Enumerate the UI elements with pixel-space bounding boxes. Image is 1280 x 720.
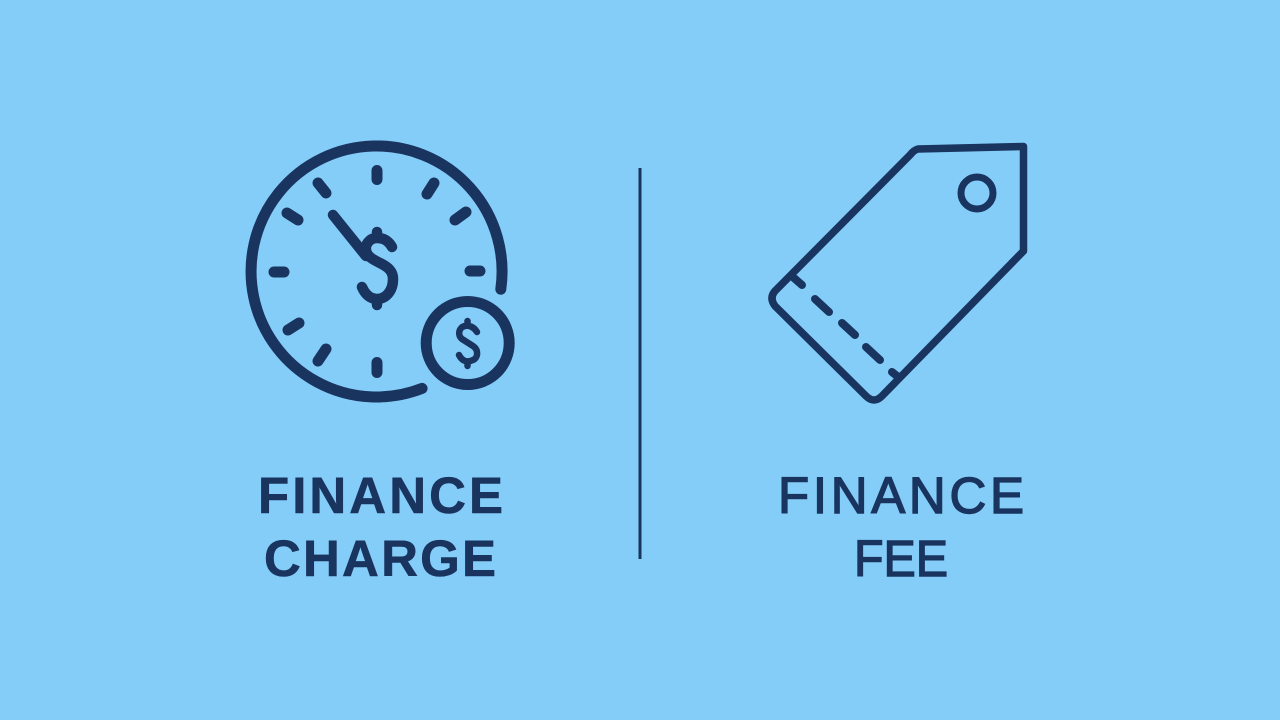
icon: price tag bbox=[772, 146, 1024, 400]
clock rim bbox=[251, 146, 502, 397]
tag dashed line bbox=[794, 278, 897, 376]
panel: finance charge bbox=[251, 146, 509, 587]
heading: finance fee: FINANCE bbox=[778, 467, 1024, 524]
panel: finance fee bbox=[772, 146, 1024, 587]
heading: finance charge bbox=[258, 467, 503, 587]
clock hand bbox=[333, 215, 366, 256]
heading: finance charge: FINANCE bbox=[258, 467, 503, 524]
clock ticks bbox=[274, 170, 480, 372]
tag outline bbox=[772, 146, 1024, 400]
tag hole bbox=[961, 177, 993, 209]
icon: clock with dollar bbox=[251, 146, 509, 397]
coin bbox=[426, 302, 509, 384]
divider bbox=[638, 168, 642, 559]
heading: finance fee bbox=[778, 467, 1024, 587]
coin dollar sign bbox=[459, 321, 477, 366]
heading: finance fee: FEE bbox=[854, 530, 948, 587]
heading: finance charge: CHARGE bbox=[264, 530, 496, 587]
dollar sign bbox=[362, 232, 393, 305]
